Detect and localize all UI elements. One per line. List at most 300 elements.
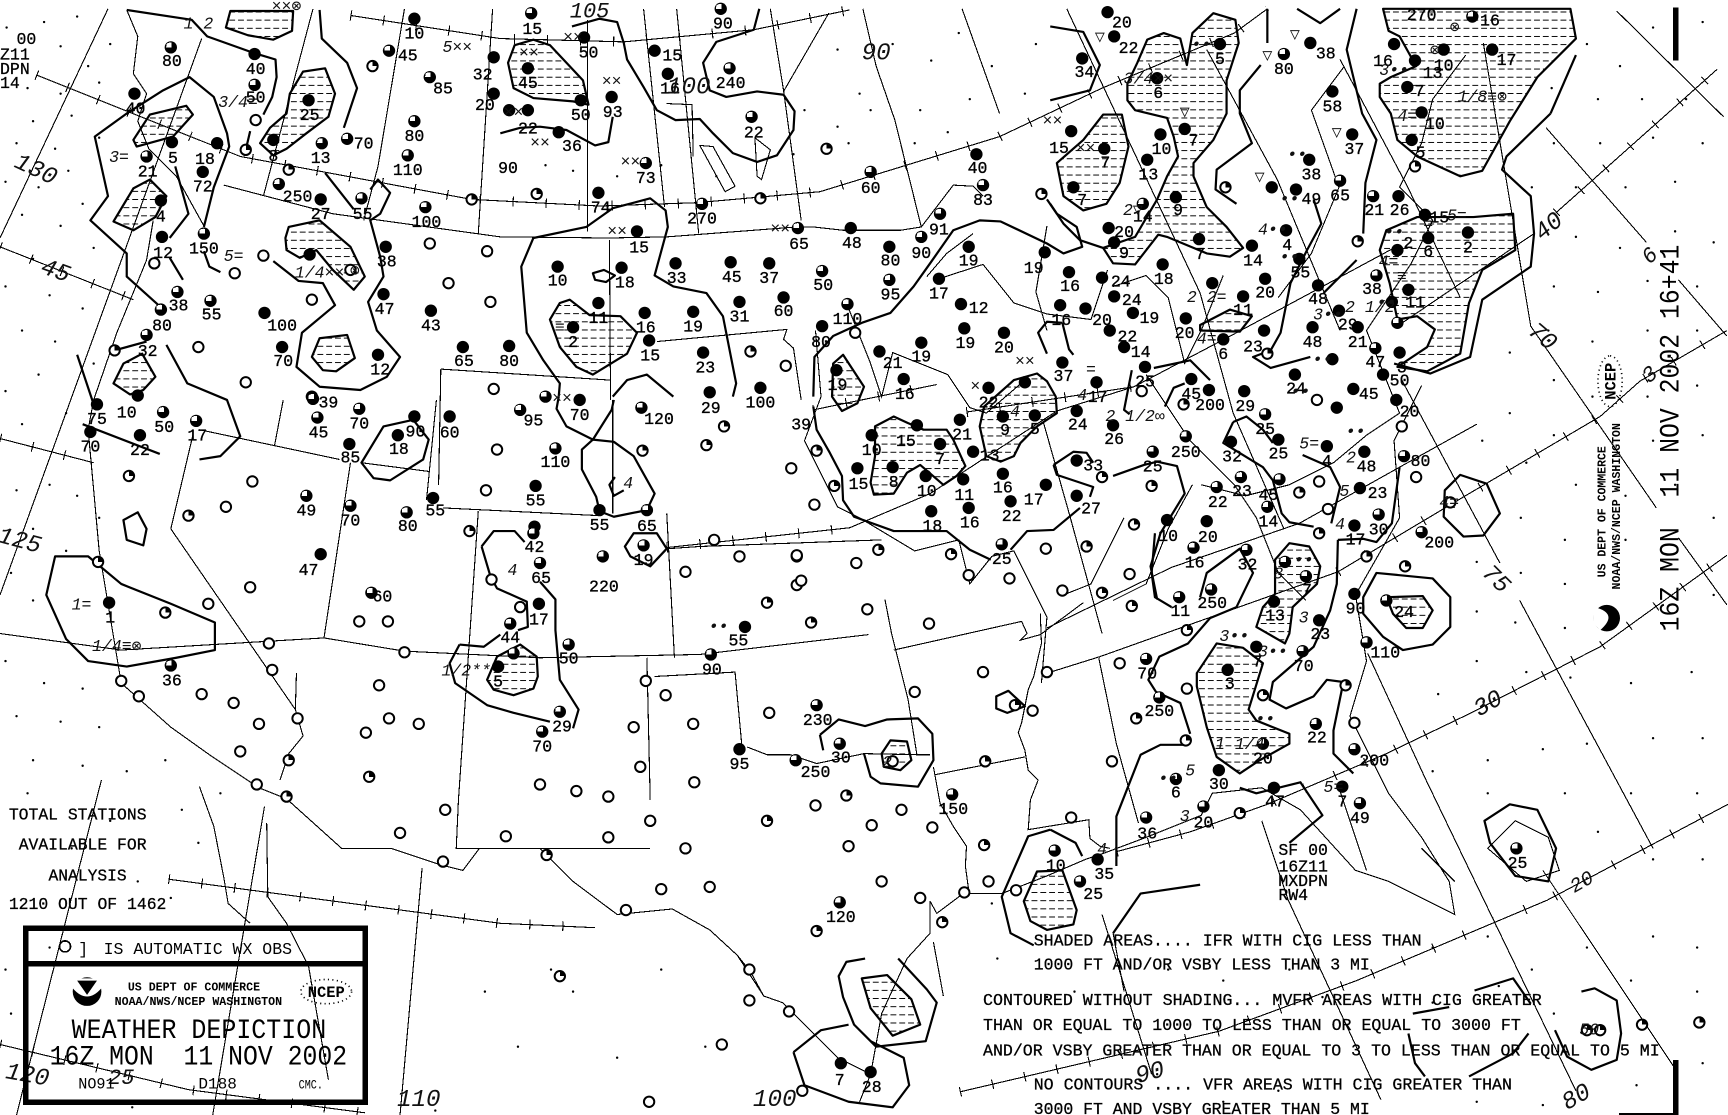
weather symbols and visibility values: •• <box>1384 223 1404 242</box>
map coordinate labels: 100 <box>667 75 711 102</box>
weather symbols and visibility values: ⊗ <box>1450 18 1460 37</box>
station ceiling values: 200 <box>1195 396 1225 415</box>
station ceiling values: 7 <box>1302 581 1312 600</box>
station ceiling values: 24 <box>1286 379 1306 398</box>
weather symbols and visibility values: 5×× <box>442 38 472 57</box>
station ceiling values: 50 <box>246 88 266 107</box>
station ceiling values: 18 <box>389 440 409 459</box>
weather symbols and visibility values: ×× <box>770 220 790 239</box>
weather symbols and visibility values: •• <box>1279 248 1299 267</box>
station ceiling values: 70 <box>80 438 100 457</box>
station ceiling values: 5 <box>1416 144 1425 163</box>
station ceiling values: 24 <box>1122 291 1142 310</box>
map coordinate labels: 3 <box>1637 362 1664 389</box>
station ceiling values: 250 <box>1197 594 1227 613</box>
station ceiling values: 16 <box>1185 553 1205 572</box>
station ceiling values: 150 <box>189 239 219 258</box>
station ceiling values: 100 <box>412 213 441 232</box>
station ceiling values: 25 <box>1255 420 1275 439</box>
station ceiling values: 30 <box>1369 520 1389 539</box>
station ceiling values: 95 <box>730 755 749 774</box>
station ceiling values: 10 <box>1425 115 1445 134</box>
station ceiling values: 11 <box>1233 301 1253 320</box>
station ceiling values: 55 <box>728 632 748 651</box>
station ceiling values: 16 <box>960 514 980 533</box>
weather symbols and visibility values: •• <box>709 617 728 636</box>
station ceiling values: 50 <box>559 649 579 668</box>
station ceiling values: 49 <box>296 502 316 521</box>
station ceiling values: 80 <box>499 352 519 371</box>
station ceiling values: 270 <box>1407 6 1437 25</box>
station ceiling values: 90 <box>498 159 518 178</box>
station ceiling values: 250 <box>1171 443 1201 462</box>
station ceiling values: 28 <box>862 1078 882 1097</box>
station ceiling values: 70 <box>1137 665 1157 684</box>
station ceiling values: 17 <box>929 285 949 304</box>
station ceiling values: 25 <box>300 106 320 125</box>
corner registration marks <box>1619 8 1678 1115</box>
weather symbols and visibility values: ×× <box>1015 352 1035 371</box>
station ceiling values: 42 <box>525 538 544 557</box>
station ceiling values: 32 <box>1238 556 1257 575</box>
station ceiling values: 22 <box>1117 328 1137 347</box>
chart note SF 00 <box>1278 841 1328 905</box>
station ceiling values: 33 <box>1083 456 1103 475</box>
weather symbols and visibility values: 4= <box>1439 493 1459 512</box>
weather symbols and visibility values: 2 1/2∞ <box>1105 407 1165 426</box>
station ceiling values: 45 <box>1181 385 1201 404</box>
station ceiling values: 19 <box>683 318 703 337</box>
station ceiling values: 25 <box>1083 885 1103 904</box>
rotated chart date at right edge: 16Z MON 11 NOV 2002 16+41 <box>1656 245 1687 631</box>
station ceiling values: 90 <box>911 244 931 263</box>
weather symbols and visibility values: 4= <box>1197 330 1217 349</box>
station ceiling values: 7 <box>1195 245 1205 264</box>
icon: NCEP logo: NCEP <box>308 984 345 1002</box>
station ceiling values: 22 <box>1119 39 1138 58</box>
station ceiling values: 110 <box>833 310 862 329</box>
station ceiling values: 47 <box>299 561 318 580</box>
weather symbols and visibility values: ⊗ <box>350 261 360 280</box>
station ceiling values: 24 <box>1111 272 1131 291</box>
station ceiling values: 110 <box>1370 644 1400 663</box>
weather symbols and visibility values: 1/4×× <box>295 264 344 283</box>
station ceiling values: 50 <box>579 43 598 62</box>
weather symbols and visibility values: •• <box>1279 190 1299 209</box>
weather symbols and visibility values: ×× <box>607 222 627 241</box>
station ceiling values: 12 <box>370 361 390 380</box>
station ceiling values: 16 <box>1480 11 1500 30</box>
station ceiling values: 24 <box>1068 416 1088 435</box>
cut-off chart note at top left <box>0 30 36 93</box>
station ceiling values: 55 <box>353 205 372 224</box>
chart codes <box>78 1076 323 1094</box>
station ceiling values: 55 <box>202 306 222 325</box>
station ceiling values: 20 <box>1255 283 1275 302</box>
chart codes: NO91 <box>78 1076 115 1094</box>
station ceiling values: 45 <box>309 423 328 442</box>
station ceiling values: 7 <box>835 1071 845 1090</box>
station ceiling values: 22 <box>979 394 998 413</box>
station ceiling values: 48 <box>1308 290 1328 309</box>
weather symbols and visibility values: 3/4= <box>218 93 258 112</box>
station ceiling values: 38 <box>169 297 188 316</box>
station ceiling values: 80 <box>152 317 172 336</box>
station ceiling values: 70 <box>570 406 590 425</box>
partially filled station markers <box>140 3 1523 909</box>
weather symbols and visibility values: = <box>1423 215 1433 234</box>
station ceiling values: 4 <box>156 207 166 226</box>
map coordinate labels: 20 <box>1566 866 1598 898</box>
legend text for shaded and contoured areas: SHADED AREAS.... IFR WITH CIG LESS THAN <box>1034 931 1422 950</box>
station ceiling values: 55 <box>425 502 445 521</box>
station ceiling values: 16 <box>895 385 915 404</box>
weather symbols and visibility values: ×× <box>1076 139 1095 158</box>
weather symbols and visibility values: 4 <box>1077 386 1087 405</box>
station ceiling values: 16 <box>660 80 680 99</box>
weather symbols and visibility values: 3 <box>1180 807 1190 826</box>
map coordinate labels: 120 <box>3 1059 51 1093</box>
weather symbols and visibility values: 1/4≡⊗ <box>92 637 142 656</box>
agency text: US DEPT OF COMMERCE <box>128 981 260 994</box>
station ceiling values: 65 <box>1330 187 1350 206</box>
weather symbols and visibility values: 1/2** <box>441 661 491 680</box>
weather symbols and visibility values: 4•• <box>1258 221 1288 240</box>
station ceiling values: 13 <box>1265 606 1285 625</box>
weather symbols and visibility values: 5= <box>224 247 244 266</box>
station ceiling values: 21 <box>1364 201 1384 220</box>
station ceiling values: 270 <box>687 210 717 229</box>
station ceiling values: 75 <box>87 410 107 429</box>
weather symbols and visibility values: •• <box>1346 422 1365 441</box>
station ceiling values: 49 <box>1350 809 1370 828</box>
station ceiling values: 58 <box>1322 97 1342 116</box>
station ceiling values: 7 <box>1100 153 1110 172</box>
station ceiling values: 6 <box>1171 784 1181 803</box>
station ceiling values: 65 <box>531 569 551 588</box>
station ceiling values: 11 <box>954 486 974 505</box>
station ceiling values: 220 <box>589 578 619 597</box>
station ceiling values: 80 <box>881 252 900 271</box>
station ceiling values: 40 <box>246 60 266 79</box>
station ceiling values: 7 <box>1189 131 1198 150</box>
station ceiling values: 25 <box>1143 458 1163 477</box>
station ceiling values: 100 <box>746 394 775 413</box>
station ceiling values: 23 <box>1243 337 1263 356</box>
weather symbols and visibility values: 4 <box>1097 840 1107 859</box>
title block panel <box>23 928 368 1102</box>
station ceiling values: 23 <box>695 358 715 377</box>
chart note SF 00: SF 00 <box>1278 841 1328 860</box>
map coordinate labels: 40 <box>1530 208 1570 247</box>
station ceiling values: 12 <box>969 299 989 318</box>
station ceiling values: 36 <box>1137 824 1157 843</box>
map coordinate labels: 75 <box>1475 560 1515 600</box>
station ceiling values: 16 <box>1051 311 1071 330</box>
station ceiling values: 60 <box>372 588 392 607</box>
map coordinate labels: 105 <box>570 0 609 25</box>
station ceiling values: 23 <box>1310 625 1330 644</box>
station ceiling values: 30 <box>831 748 851 767</box>
station ceiling values: 5 <box>1215 50 1225 69</box>
station ceiling values: 90 <box>702 660 722 679</box>
station ceiling values: 25 <box>1268 444 1288 463</box>
map coordinate labels: 45 <box>37 254 73 290</box>
station ceiling values: 36 <box>562 137 582 156</box>
station ceiling values: 17 <box>1024 491 1044 510</box>
station ceiling values: 18 <box>1154 270 1174 289</box>
station ceiling values: 9 <box>1119 244 1129 263</box>
station ceiling values: 55 <box>526 492 546 511</box>
station ceiling values: 15 <box>1429 209 1449 228</box>
station count note: TOTAL STATIONS <box>9 806 147 825</box>
station ceiling values: 74 <box>591 199 611 218</box>
weather symbols and visibility values: 1 2 <box>183 15 213 34</box>
station ceiling values: 6 <box>1218 345 1228 364</box>
station ceiling values: 4 <box>1282 236 1292 255</box>
station ceiling values: 95 <box>523 411 543 430</box>
weather symbols and visibility values: 3•• <box>1258 643 1288 662</box>
station ceiling values: 39 <box>791 416 811 435</box>
station ceiling values: 10 <box>1158 527 1178 546</box>
station ceiling values: 23 <box>1368 484 1387 503</box>
chart date: 16Z MON 11 NOV 2002 <box>50 1042 347 1073</box>
station ceiling values: 70 <box>354 135 374 154</box>
map coordinate labels: 6 <box>1637 243 1664 270</box>
station ceiling values: 80 <box>811 333 831 352</box>
weather symbols and visibility values: 3•• <box>1219 627 1249 646</box>
station ceiling values: 60 <box>440 423 460 442</box>
station ceiling values: 20 <box>1114 223 1134 242</box>
station ceiling values: 22 <box>744 124 764 143</box>
station ceiling values: 47 <box>1365 353 1385 372</box>
rotated agency text: NOAA/NWS/NCEP WASHINGTON <box>1610 423 1624 589</box>
station ceiling values: 45 <box>1259 486 1278 505</box>
station ceiling values: 8 <box>889 473 899 492</box>
weather symbols and visibility values: 4= <box>1379 253 1398 272</box>
icon: rotated NOAA logo <box>1594 605 1620 631</box>
station count note: 1210 OUT OF 1462 <box>9 895 166 914</box>
station ceiling values: 15 <box>896 432 916 451</box>
station ceiling values: 73 <box>636 169 656 188</box>
station ceiling values: 37 <box>1344 140 1364 159</box>
station ceiling values: 14 <box>1243 252 1263 271</box>
legend text for shaded and contoured areas: 1000 FT AND/OR VSBY LESS THAN 3 MI <box>1034 956 1370 975</box>
station ceiling values: 48 <box>1357 458 1376 477</box>
station ceiling values: 22 <box>1208 493 1228 512</box>
legend text for shaded and contoured areas <box>983 931 1660 1115</box>
weather symbols and visibility values: •• <box>1376 293 1396 312</box>
legend text for shaded and contoured areas: CONTOURED WITHOUT SHADING... MVFR AREAS WITH CIG GREATER <box>983 991 1542 1010</box>
station ceiling values: 19 <box>955 334 975 353</box>
weather symbols and visibility values: •• <box>1290 383 1310 402</box>
chart codes: D188 <box>198 1076 237 1094</box>
station ceiling values: 20 <box>1400 402 1419 421</box>
weather symbols and visibility values: ≡ <box>555 319 565 338</box>
station ceiling values: 10 <box>917 482 937 501</box>
station ceiling values: 250 <box>1144 702 1174 721</box>
weather symbols and visibility values: ⊗ <box>1430 41 1440 60</box>
station ceiling values: 55 <box>1290 264 1310 283</box>
weather symbols and visibility values: 5= <box>1299 434 1319 453</box>
station ceiling values: 45 <box>722 268 742 287</box>
weather symbols and visibility values: 4 <box>1335 515 1345 534</box>
station ceiling values: 3 <box>1225 675 1235 694</box>
station ceiling values: 80 <box>162 52 182 71</box>
station ceiling values: 50 <box>154 418 174 437</box>
station ceiling values: 27 <box>311 205 331 224</box>
station ceiling values: 6 <box>1423 243 1433 262</box>
station ceiling values: 35 <box>1094 865 1114 884</box>
station ceiling values: 10 <box>1434 57 1454 76</box>
station ceiling values: 34 <box>1074 63 1094 82</box>
weather symbols and visibility values: ▽ <box>1332 124 1342 143</box>
station ceiling values: 22 <box>1002 507 1022 526</box>
weather symbols and visibility values: 2 <box>1346 449 1356 468</box>
weather symbols and visibility values: 8 <box>1273 564 1283 583</box>
weather symbols and visibility values: 3 <box>1299 609 1309 628</box>
station ceiling values: 9 <box>1000 421 1010 440</box>
icon: rotated NCEP logo: NCEP <box>1603 363 1621 400</box>
agency text <box>115 981 282 1009</box>
weather symbols and visibility values: ▽ <box>1255 168 1265 187</box>
station ceiling values: 150 <box>938 800 968 819</box>
station ceiling values: 23 <box>1232 482 1252 501</box>
weather symbols and visibility values: 3= <box>109 148 129 167</box>
weather symbols and visibility values: ▽ <box>1095 28 1105 47</box>
station ceiling values: 15 <box>522 20 542 39</box>
station ceiling values: 65 <box>789 235 809 254</box>
weather symbols and visibility values: •• <box>1191 36 1211 55</box>
station ceiling values: 17 <box>1346 530 1365 549</box>
station ceiling values: 14 <box>1133 207 1153 226</box>
station ceiling values: 7 <box>1077 191 1087 210</box>
IFR shaded areas <box>114 9 1576 1036</box>
weather symbols and visibility values: 1= <box>72 595 91 614</box>
station count note: AVAILABLE FOR <box>19 835 147 854</box>
weather symbols and visibility values: ×× <box>602 72 622 91</box>
station ceiling values: 48 <box>1303 333 1322 352</box>
weather symbols and visibility values: 2▽ <box>1123 201 1143 220</box>
station ceiling values: 65 <box>454 352 474 371</box>
station ceiling values: 100 <box>267 317 297 336</box>
station ceiling values: 85 <box>341 449 360 468</box>
station ceiling values: 16 <box>1060 277 1080 296</box>
station ceiling values: 29 <box>701 399 721 418</box>
weather symbols and visibility values: ×× <box>1043 112 1062 131</box>
station ceiling values: 26 <box>1390 201 1410 220</box>
station ceiling values: 48 <box>842 234 862 253</box>
station ceiling values: 70 <box>532 737 552 756</box>
station count note: ANALYSIS <box>48 866 127 885</box>
station ceiling values: 18 <box>615 274 635 293</box>
map coordinate labels: 30 <box>1470 686 1508 724</box>
weather symbols and visibility values: 4 <box>623 474 633 493</box>
weather symbols and visibility values: 4 <box>507 561 517 580</box>
icon: rotated NCEP logo <box>1598 356 1622 407</box>
weather symbols and visibility values: •• <box>1158 769 1178 788</box>
station ceiling values: 2 <box>568 333 578 352</box>
weather symbols and visibility values: ▽ <box>1180 103 1190 122</box>
station ceiling values: 14 <box>1131 343 1151 362</box>
chart note SF 00: RW4 <box>1278 886 1308 905</box>
station ceiling values: 25 <box>1135 373 1155 392</box>
station ceiling values: 230 <box>803 711 833 730</box>
weather symbols and visibility values: 2 2= <box>1187 288 1227 307</box>
station ceiling values: 18 <box>922 517 942 536</box>
station ceiling values: 20 <box>1253 750 1273 769</box>
station ceiling values: 20 <box>1112 14 1132 33</box>
station ceiling values: 17 <box>1497 51 1516 70</box>
station ceiling values: 21 <box>138 162 158 181</box>
station ceiling values: 40 <box>126 99 145 118</box>
station ceiling values: 9 <box>1173 201 1183 220</box>
station ceiling values: 200 <box>1424 534 1454 553</box>
station ceiling values: 19 <box>1140 309 1159 328</box>
station ceiling values: 13 <box>1138 166 1158 185</box>
weather symbols and visibility values: 50 <box>1579 1021 1599 1040</box>
station ceiling values: 6 <box>1153 84 1163 103</box>
map coordinate labels: 70 <box>1522 318 1561 357</box>
station ceiling values: 20 <box>475 96 495 115</box>
station ceiling values: 5 <box>493 672 503 691</box>
station ceiling values: 47 <box>1265 793 1285 812</box>
station ceiling values: 25 <box>1508 854 1527 873</box>
station ceiling values: 110 <box>541 453 570 472</box>
chart note SF 00: 16Z11 <box>1278 858 1328 877</box>
weather symbols and visibility values: 4 <box>1010 402 1020 421</box>
station ceiling values: 47 <box>375 300 395 319</box>
station ceiling values: 16 <box>1373 52 1393 71</box>
station ceiling values: 70 <box>273 352 293 371</box>
station ceiling values: 29 <box>1235 397 1255 416</box>
station ceiling values: 15 <box>629 238 649 257</box>
cut-off chart note at top left: Z11 <box>0 45 30 64</box>
map coordinate labels: 130 <box>10 149 61 192</box>
rotated agency text: US DEPT OF COMMERCE <box>1596 446 1610 577</box>
station ceiling values: 200 <box>1359 752 1389 771</box>
station ceiling values: 20 <box>1092 311 1112 330</box>
legend text for shaded and contoured areas: THAN OR EQUAL TO 1000 TO LESS THAN OR EQUAL TO 3000 FT <box>983 1016 1521 1035</box>
weather symbols and visibility values: × <box>970 377 980 396</box>
station ceiling values: 70 <box>341 512 360 531</box>
weather symbols and visibility values: ▽ <box>1290 26 1300 45</box>
station ceiling values: 7 <box>935 450 945 469</box>
map coordinate labels: 110 <box>397 1087 441 1114</box>
station ceiling values: 1 <box>105 609 115 628</box>
weather symbols and visibility values: •• <box>1287 146 1307 165</box>
station ceiling values: 95 <box>881 286 900 305</box>
station ceiling values: 14 <box>1259 513 1278 532</box>
station ceiling values: 20 <box>1198 528 1218 547</box>
station ceiling values: 15 <box>849 475 868 494</box>
map coordinate labels: 25 <box>108 1066 134 1091</box>
weather symbols and visibility values: ×× <box>563 28 583 47</box>
weather symbols and visibility values: 5 <box>1185 762 1195 781</box>
weather symbols and visibility values: ×× <box>552 389 572 408</box>
station ceiling values: 250 <box>283 188 312 207</box>
station ceiling values: 38 <box>1316 44 1336 63</box>
station ceiling values: 70 <box>349 415 369 434</box>
station ceiling values: 20 <box>1194 813 1213 832</box>
station ceiling values: 24 <box>1394 603 1414 622</box>
station ceiling values: 18 <box>195 150 215 169</box>
station ceiling values: 31 <box>730 308 749 327</box>
legend text for shaded and contoured areas: NO CONTOURS .... VFR AREAS WITH CIG GREATER THAN <box>1034 1076 1512 1095</box>
station ceiling values: 240 <box>716 74 746 93</box>
chart title: WEATHER DEPICTION <box>72 1016 326 1047</box>
station ceiling values: 38 <box>1302 166 1321 185</box>
